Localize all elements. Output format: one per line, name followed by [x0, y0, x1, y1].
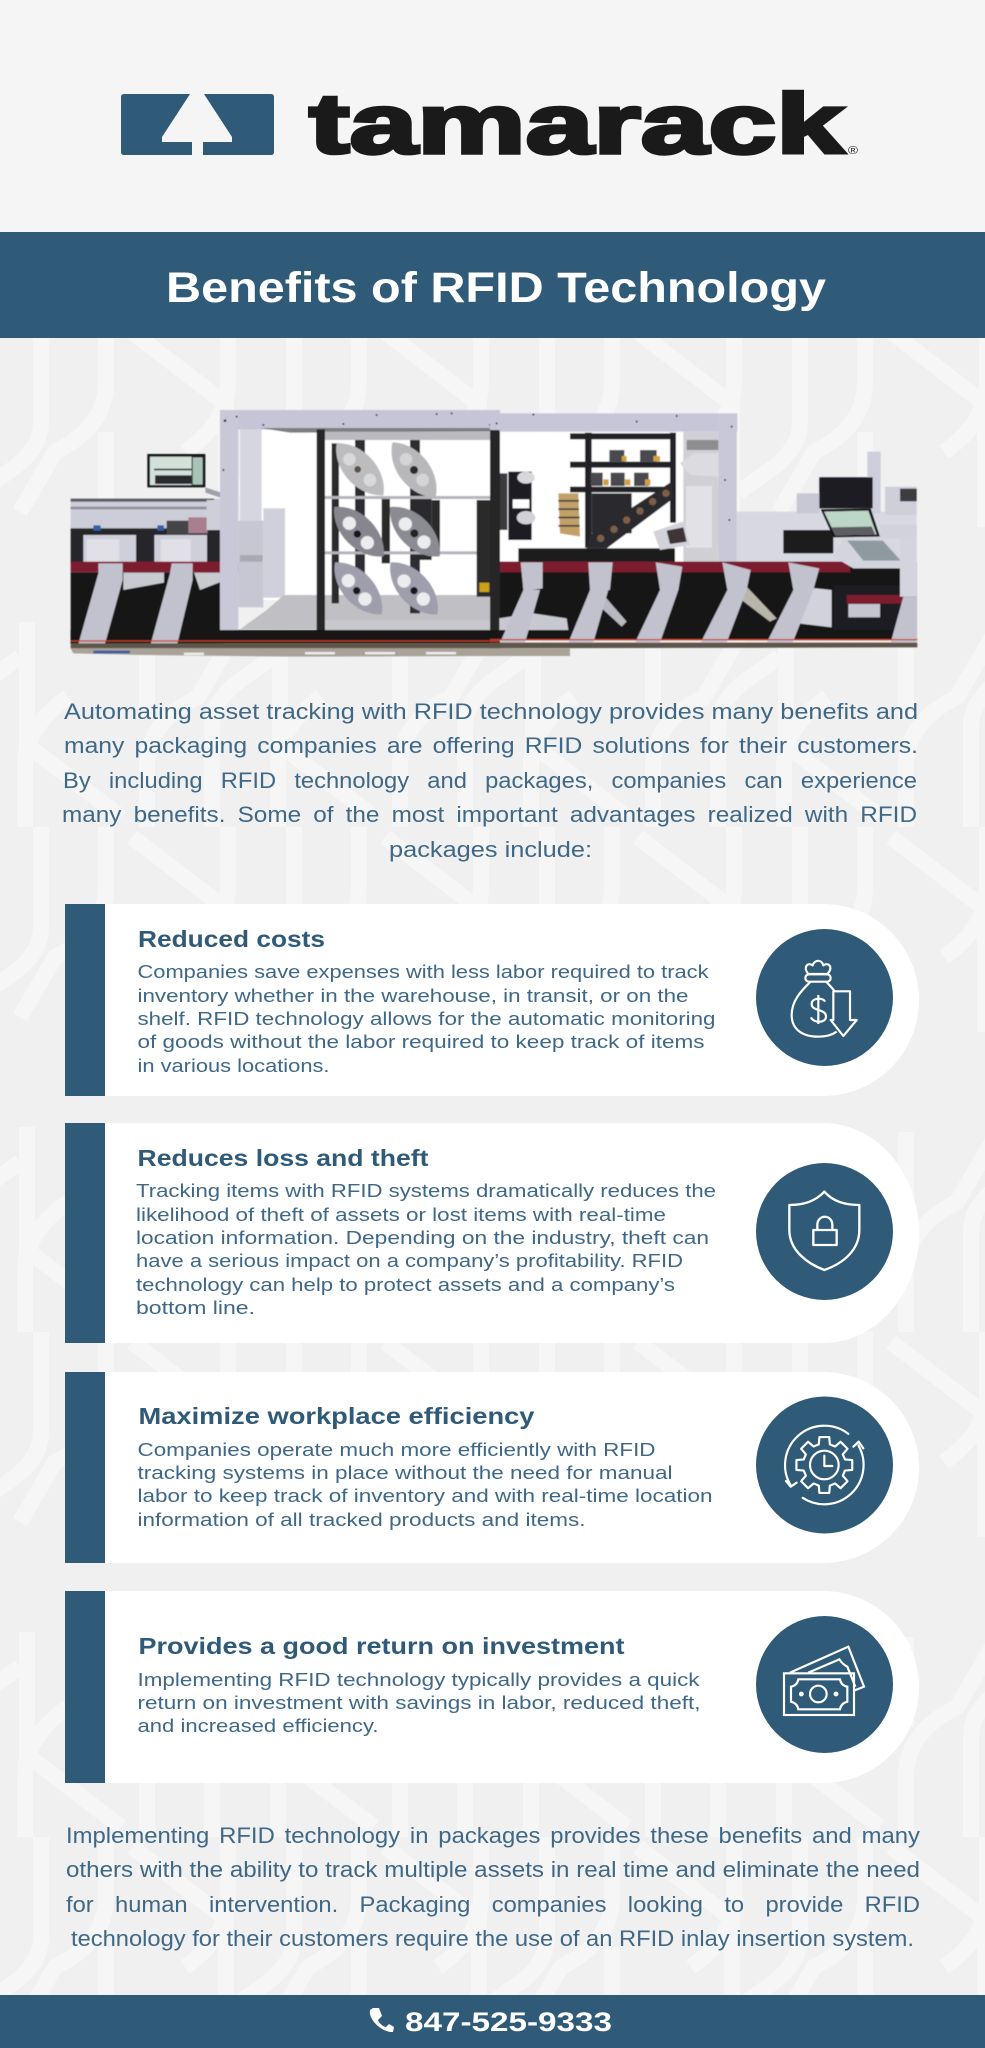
text: reduces loss and theft: likelihood of theft of assets or lost items with real-time: [136, 1204, 666, 1225]
closing paragraph: technology for their customers require the use of an RFID inlay insertion system.: [71, 1926, 914, 1951]
closing paragraph: others with the ability to track multiple assets in real time and eliminate the need: [66, 1857, 920, 1882]
intro paragraph: packages include:: [389, 837, 592, 862]
text: reduces loss and theft: technology can help to protect assets and a company’s: [136, 1274, 675, 1295]
text: maximize workplace efficiency: Companies operate much more efficiently with RFID: [138, 1439, 656, 1460]
machine right section: [490, 413, 917, 656]
title band: [0, 232, 985, 338]
icon: shield with padlock: [756, 1163, 893, 1300]
icon: logo mark: [121, 94, 274, 155]
panel: good return on investment: [65, 1591, 919, 1783]
panel: reduced costs: [65, 904, 919, 1096]
text: reduces loss and theft: location information. Depending on the industry, theft can: [136, 1227, 709, 1248]
text: good return on investment: and increased efficiency.: [138, 1715, 378, 1736]
logo: Tamarack: [121, 77, 858, 171]
text: good return on investment: return on investment with savings in labor, reduced theft,: [138, 1692, 700, 1713]
reels: [323, 433, 451, 625]
footer band: [0, 1995, 985, 2048]
text: maximize workplace efficiency: tracking systems in place without the need for manual: [138, 1462, 672, 1483]
machine left section: [71, 410, 500, 657]
text: reduces loss and theft: have a serious impact on a company’s profitability. RFID: [136, 1250, 683, 1271]
text: reduced costs: in various locations.: [138, 1055, 330, 1076]
icon: phone: [370, 2008, 394, 2032]
heading: maximize workplace efficiency: Maximize workplace efficiency: [138, 1403, 534, 1429]
text: maximize workplace efficiency: labor to keep track of inventory and with real-time location: [138, 1485, 712, 1506]
closing paragraph: [66, 1823, 921, 1951]
closing paragraph: Implementing RFID technology in packages provides these benefits and many: [66, 1823, 921, 1848]
intro paragraph: many packaging companies are offering RFID solutions for their customers.: [64, 733, 918, 758]
text: reduces loss and theft: Tracking items with RFID systems dramatically reduces the: [136, 1180, 716, 1201]
machine illustration: [71, 410, 917, 657]
heading: reduces loss and theft: Reduces loss and theft: [138, 1145, 429, 1171]
phone number: 847-525-9333: [405, 2007, 612, 2037]
text: reduced costs: Companies save expenses with less labor required to track: [138, 961, 709, 982]
text: reduced costs: inventory whether in the warehouse, in transit, or on the: [138, 985, 688, 1006]
text: reduced costs: of goods without the labor required to keep track of items: [138, 1031, 704, 1052]
text: reduces loss and theft: bottom line.: [136, 1297, 255, 1318]
closing paragraph: for human intervention. Packaging companies looking to provide RFID: [66, 1892, 920, 1917]
text: good return on investment: [138, 1669, 700, 1736]
text: reduced costs: shelf. RFID technology allows for the automatic monitoring: [138, 1008, 716, 1029]
intro paragraph: Automating asset tracking with RFID technology provides many benefits and: [64, 699, 918, 724]
text: maximize workplace efficiency: information of all tracked products and items.: [138, 1509, 586, 1530]
text: reduced costs: [138, 961, 716, 1076]
icon: gear with clock and cycle arrows: [756, 1396, 893, 1534]
intro paragraph: By including RFID technology and packages, companies can experience: [63, 768, 917, 793]
title: Benefits of RFID Technology: [166, 264, 826, 312]
heading: reduced costs: Reduced costs: [138, 926, 325, 952]
panel: maximize workplace efficiency: [65, 1372, 919, 1563]
logo wordmark: tamarack: [309, 77, 844, 171]
heading: good return on investment: Provides a good return on investment: [138, 1633, 625, 1659]
text: reduces loss and theft: [136, 1180, 716, 1318]
icon: money bag with down arrow: [756, 929, 893, 1066]
text: good return on investment: Implementing RFID technology typically provides a quick: [138, 1669, 700, 1690]
intro paragraph: [62, 699, 918, 862]
intro paragraph: many benefits. Some of the most important advantages realized with RFID: [62, 802, 917, 827]
panel: reduces loss and theft: [65, 1123, 919, 1343]
icon: banknotes: [756, 1616, 893, 1753]
text: maximize workplace efficiency: [138, 1439, 712, 1530]
registered mark: ®: [848, 145, 858, 157]
